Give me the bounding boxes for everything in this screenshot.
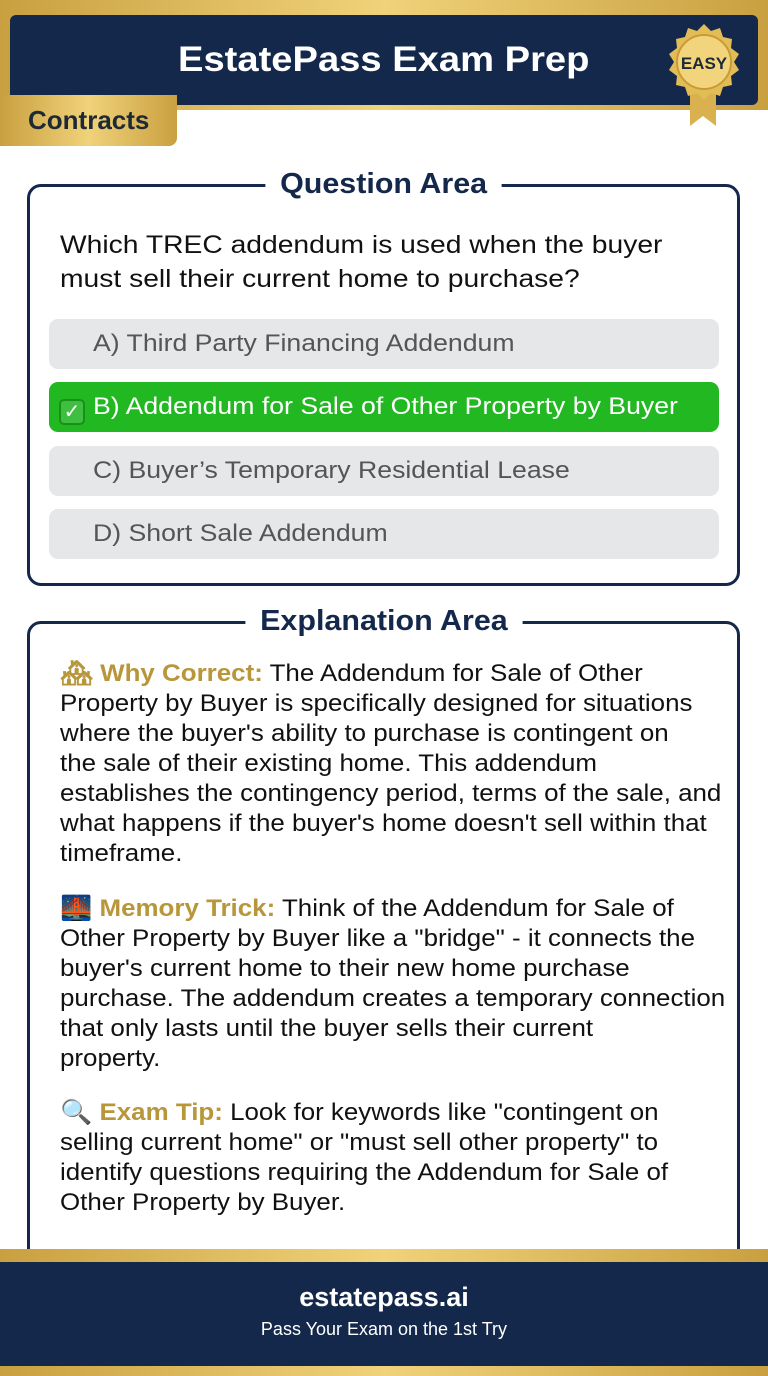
footer tagline: Pass Your Exam on the 1st Try — [261, 1319, 507, 1339]
footer — [0, 1249, 768, 1376]
text: exam tip: Other Property by Buyer. — [60, 1189, 345, 1216]
panel: explanation area — [27, 621, 740, 1321]
text: why correct: the sale of their existing home. This addendum — [60, 750, 597, 777]
badge: EASY — [669, 24, 739, 126]
text: why correct: what happens if the buyer's home doesn't sell within that — [60, 810, 707, 837]
text: memory trick — [60, 894, 725, 1072]
text: memory trick: property. — [60, 1045, 160, 1072]
option C: C) Buyer’s Temporary Residential Lease — [93, 457, 570, 484]
heading: Explanation Area: Explanation Area — [260, 605, 508, 637]
option C — [49, 446, 719, 496]
option A: A) Third Party Financing Addendum — [93, 330, 515, 357]
question text — [60, 231, 662, 293]
category tab: Contracts: Contracts — [28, 105, 149, 135]
option B (correct): ✓ — [64, 401, 80, 423]
footer site name: estatepass.ai — [299, 1282, 469, 1312]
option B (correct): B) Addendum for Sale of Other Property by Buyer — [93, 393, 678, 420]
text: memory trick: purchase. The addendum creates a temporary connection — [60, 985, 725, 1012]
text: exam tip: identify questions requiring the Addendum for Sale of — [60, 1159, 668, 1186]
header banner — [10, 15, 758, 105]
footer navy band — [0, 1262, 768, 1366]
header banner: EstatePass Exam Prep — [178, 40, 590, 79]
text: memory trick: Other Property by Buyer like a "bridge" - it connects the — [60, 925, 695, 952]
text: memory trick: buyer's current home to their new home purchase — [60, 955, 630, 982]
text: memory trick: that only lasts until the buyer sells their current — [60, 1015, 593, 1042]
text: memory trick: 🌉 Memory Trick: Think of the Addendum for Sale of — [60, 895, 674, 922]
question text: must sell their current home to purchase? — [60, 265, 580, 293]
text: why correct: 🏘 Why Correct: The Addendum for Sale of Other — [60, 660, 643, 687]
question text: Which TREC addendum is used when the buyer — [60, 231, 662, 259]
heading: Question Area: Question Area — [280, 168, 487, 200]
badge: EASY: EASY — [681, 54, 728, 73]
white area below header — [0, 110, 768, 150]
text: exam tip: selling current home" or "must sell other property" to — [60, 1129, 658, 1156]
text: why correct: timeframe. — [60, 840, 182, 867]
option D — [49, 509, 719, 559]
option A — [49, 319, 719, 369]
text: exam tip — [60, 1098, 668, 1216]
option D: D) Short Sale Addendum — [93, 520, 388, 547]
panel: question area — [27, 184, 740, 586]
text: why correct: where the buyer's ability to purchase is contingent on — [60, 720, 669, 747]
text: why correct — [60, 660, 721, 867]
option B (correct) — [49, 382, 719, 432]
top gold band — [0, 0, 768, 110]
category tab: Contracts — [0, 95, 177, 146]
text: why correct: Property by Buyer is specifically designed for situations — [60, 690, 692, 717]
text: exam tip: 🔍 Exam Tip: Look for keywords like "contingent on — [60, 1099, 659, 1126]
text: why correct: establishes the contingency period, terms of the sale, and — [60, 780, 721, 807]
